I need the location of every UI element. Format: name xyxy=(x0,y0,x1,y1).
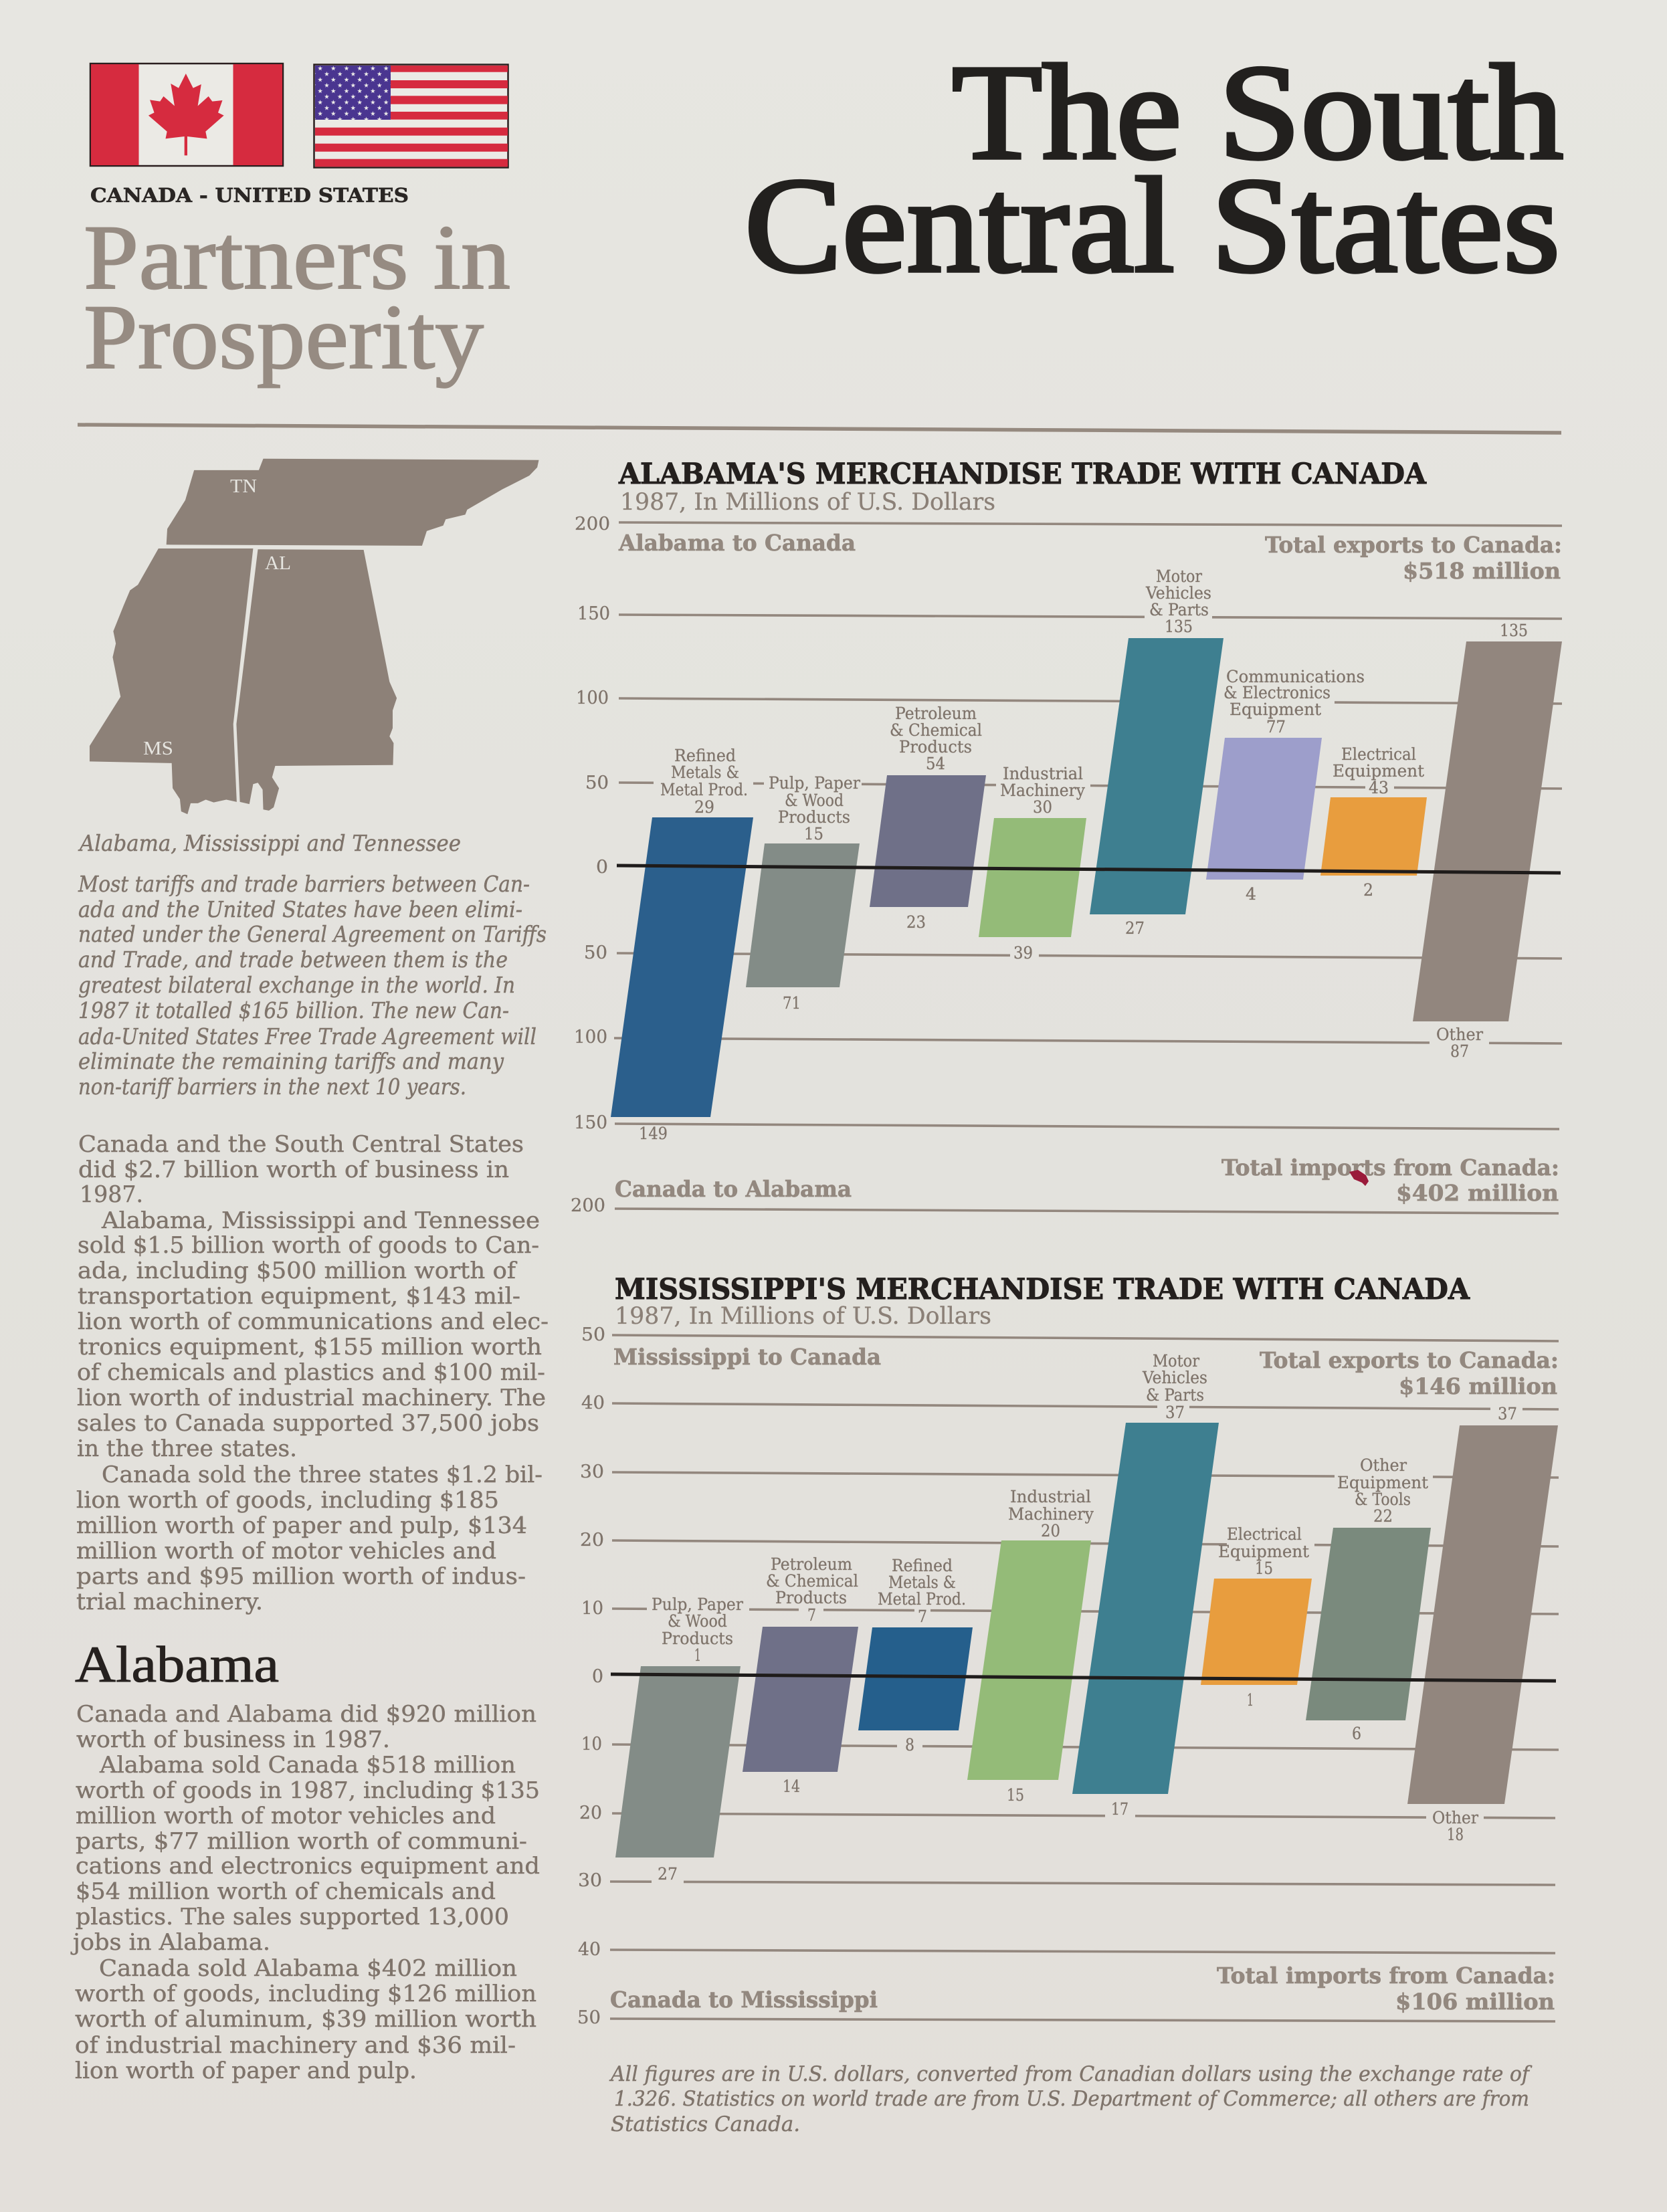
icon: United States flag xyxy=(314,64,508,167)
axis labels: Mississippi: 50 xyxy=(581,1324,605,1345)
legend label: Canada to Alabama: Canada to Alabama xyxy=(615,1176,852,1202)
chart subtitle: Alabama: 1987, In Millions of U.S. Dollars xyxy=(620,489,995,516)
bar: Industrial Machinery: Industrial xyxy=(1010,1487,1091,1506)
bar: Electrical Equipment: 15 xyxy=(1255,1559,1273,1578)
heading: Partners in Prosperity xyxy=(84,206,510,388)
text block: South Central States body: did $2.7 billion worth of business in xyxy=(78,1157,509,1183)
bar: Motor Vehicles and Parts: 135 xyxy=(1165,617,1193,636)
text block: Alabama body: Canada and Alabama did $920 million xyxy=(76,1701,536,1728)
legend label: Canada to Mississippi: Canada to Mississippi xyxy=(610,1987,878,2013)
bar: Other xyxy=(1407,1404,1558,1844)
text block: South Central States body: lion worth of goods, including $185 xyxy=(76,1487,499,1514)
callout: total exports Mississippi xyxy=(1260,1347,1559,1399)
bar: Other: Other xyxy=(1436,1025,1483,1044)
bar: Other: 18 xyxy=(1447,1825,1464,1844)
text block: South Central States body: ada, including $500 million worth of xyxy=(78,1258,518,1284)
chart subtitle: Mississippi: 1987, In Millions of U.S. Dollars xyxy=(615,1303,991,1330)
text block: Alabama body: of industrial machinery and $36 mil- xyxy=(75,2032,516,2059)
bar: Refined Metals and Metal Products: 8 xyxy=(905,1735,914,1754)
text block: Alabama body: worth of goods, including $126 million xyxy=(75,1981,536,2007)
axis labels: Mississippi: 30 xyxy=(578,1870,602,1891)
bar: Electrical Equipment: 43 xyxy=(1369,778,1389,797)
callout: total imports Alabama: $402 million xyxy=(1396,1180,1559,1206)
map caption: Alabama, Mississippi and Tennessee xyxy=(78,830,461,856)
axis labels: Alabama: 150 xyxy=(577,603,610,624)
bar: Petroleum and Chemical Products xyxy=(743,1554,858,1796)
text block: South Central States body: in the three states. xyxy=(77,1435,297,1462)
legend label: Mississippi to Canada: Mississippi to Canada xyxy=(613,1344,881,1370)
text block: italic introduction: and Trade, and trade between them is the xyxy=(78,946,508,973)
text block: South Central States body: million worth of paper and pulp, $134 xyxy=(76,1512,527,1539)
bar: Refined Metals and Metal Products: 29 xyxy=(694,797,714,817)
text block: South Central States body xyxy=(76,1131,549,1615)
bar: Petroleum and Chemical Products: Petroleum xyxy=(771,1554,852,1574)
bar: Other: 37 xyxy=(1498,1404,1517,1423)
bar: Refined Metals and Metal Products: 7 xyxy=(918,1607,927,1626)
bar: Refined Metals and Metal Products: Metal Prod. xyxy=(660,780,748,799)
bar: Communications and Electronics Equipment: 4 xyxy=(1246,884,1256,904)
callout: total exports Mississippi: Total exports to Canada: xyxy=(1260,1347,1559,1373)
panel: Mississippi chart xyxy=(577,1273,1559,2028)
axis labels: Alabama: 50 xyxy=(584,942,607,963)
bar: Pulp, Paper and Wood Products xyxy=(615,1595,743,1884)
bar: Other: 87 xyxy=(1450,1041,1469,1061)
bar: Pulp, Paper and Wood Products: Pulp, Paper xyxy=(652,1595,743,1614)
axis labels: Mississippi: 10 xyxy=(581,1598,603,1619)
text block: italic introduction: Most tariffs and trade barriers between Can- xyxy=(78,871,530,897)
bar: Petroleum and Chemical Products: Products xyxy=(899,737,972,757)
text block: Alabama body: worth of goods in 1987, including $135 xyxy=(76,1777,540,1804)
axis labels: Mississippi: 0 xyxy=(592,1666,603,1687)
bar: Pulp, Paper and Wood Products: Products xyxy=(778,807,850,827)
bar: Motor Vehicles and Parts xyxy=(1072,1351,1219,1819)
bar: Electrical Equipment: 1 xyxy=(1247,1690,1254,1710)
text block: South Central States body: 1987. xyxy=(80,1181,143,1208)
text block: Alabama body: parts, $77 million worth of communi- xyxy=(76,1828,527,1855)
bar: Motor Vehicles and Parts: & Parts xyxy=(1149,600,1209,619)
bar: Communications and Electronics Equipment: Communications xyxy=(1226,667,1365,686)
chart heading: Mississippi: MISSISSIPPI'S MERCHANDISE TRADE WITH CANADA xyxy=(615,1273,1470,1306)
callout: total exports Alabama: $518 million xyxy=(1403,558,1561,584)
text block: South Central States body: parts and $95 million worth of indus- xyxy=(76,1563,526,1590)
bar: Communications and Electronics Equipment: Equipment xyxy=(1230,700,1321,719)
bar: Petroleum and Chemical Products: & Chemical xyxy=(890,720,982,740)
callout: total imports Mississippi xyxy=(1217,1963,1555,2015)
bar: Refined Metals and Metal Products: Refined xyxy=(892,1556,953,1575)
text block: South Central States body: Alabama, Mississippi and Tennessee xyxy=(101,1207,540,1234)
bar: Other Equipment and Tools: 6 xyxy=(1352,1724,1361,1743)
bar: Petroleum and Chemical Products: Petroleum xyxy=(895,704,977,723)
axis labels: Mississippi: 20 xyxy=(579,1803,602,1823)
bar: Industrial Machinery: Machinery xyxy=(1008,1504,1094,1524)
axis labels: Mississippi: 40 xyxy=(578,1939,601,1960)
text block: South Central States body: tronics equipment, $155 million worth xyxy=(78,1334,542,1361)
bar: Industrial Machinery: Industrial xyxy=(1003,764,1083,783)
axis labels: Mississippi: 10 xyxy=(581,1734,602,1754)
text block: Alabama body: worth of business in 1987. xyxy=(76,1726,390,1753)
axis labels: Mississippi: 50 xyxy=(577,2007,601,2028)
callout: total imports Alabama xyxy=(1221,1154,1559,1206)
bar: Electrical Equipment: Electrical xyxy=(1341,744,1416,764)
callout: total exports Alabama: Total exports to Canada: xyxy=(1265,532,1562,558)
bar: Motor Vehicles and Parts: & Parts xyxy=(1146,1385,1204,1405)
legend label: Alabama to Canada: Alabama to Canada xyxy=(618,530,856,556)
bar: Electrical Equipment: Equipment xyxy=(1218,1542,1309,1561)
text block: South Central States body: lion worth of communications and elec- xyxy=(78,1308,549,1335)
text block: italic introduction: ada-United States Free Trade Agreement will xyxy=(78,1023,536,1049)
text block: italic introduction: non-tariff barriers in the next 10 years. xyxy=(78,1074,466,1100)
bar: Motor Vehicles and Parts: Motor xyxy=(1156,567,1202,586)
bar: Industrial Machinery: 30 xyxy=(1033,797,1052,817)
axis labels: Alabama: 100 xyxy=(576,688,609,708)
axis labels: Alabama: 150 xyxy=(574,1112,607,1133)
callout: total imports Alabama: Total imports from Canada: xyxy=(1221,1154,1559,1181)
text block: South Central States body: Canada and the South Central States xyxy=(78,1131,524,1158)
bar: Pulp, Paper and Wood Products: & Wood xyxy=(785,791,844,810)
bar: Petroleum and Chemical Products: 54 xyxy=(926,754,945,773)
text block: italic introduction: 1987 it totalled $165 billion. The new Can- xyxy=(78,997,509,1023)
bar: Pulp, Paper and Wood Products: Products xyxy=(662,1629,733,1648)
bar: Other xyxy=(1413,621,1562,1061)
bar: Motor Vehicles and Parts xyxy=(1090,567,1223,938)
bar: Other Equipment and Tools xyxy=(1306,1455,1431,1743)
bar: Electrical Equipment: 2 xyxy=(1363,880,1373,900)
bar: Industrial Machinery: Machinery xyxy=(1000,781,1086,800)
heading: Alabama: Alabama xyxy=(75,1635,279,1693)
heading: Canada - United States: CANADA - UNITED STATES xyxy=(90,184,409,207)
text block: italic introduction: nated under the General Agreement on Tariffs xyxy=(78,921,547,947)
text block: South Central States body: sales to Canada supported 37,500 jobs xyxy=(77,1410,539,1437)
bar: Petroleum and Chemical Products: & Chemical xyxy=(766,1571,858,1591)
axis labels: Mississippi: 20 xyxy=(580,1530,604,1550)
bar: Refined Metals and Metal Products: Refined xyxy=(674,746,736,765)
axis labels: Alabama xyxy=(571,514,610,1216)
callout: total exports Mississippi: $146 million xyxy=(1399,1373,1557,1399)
text block: Alabama body: plastics. The sales supported 13,000 xyxy=(76,1904,509,1930)
bar: Motor Vehicles and Parts: Vehicles xyxy=(1145,583,1211,603)
bar: Industrial Machinery: 20 xyxy=(1041,1521,1060,1540)
title: The South Central States: Central States xyxy=(745,150,1560,300)
bar: Petroleum and Chemical Products: 14 xyxy=(783,1777,800,1796)
text block: Alabama body: jobs in Alabama. xyxy=(70,1929,270,1956)
callout: total imports Mississippi: $106 million xyxy=(1395,1989,1555,2015)
axis labels: Alabama: 50 xyxy=(585,773,609,793)
heading: Partners in Prosperity: Prosperity xyxy=(84,286,484,388)
panel: Alabama chart xyxy=(571,458,1562,1216)
map: Alabama, Mississippi and Tennessee: TN xyxy=(230,476,257,497)
bar: Communications and Electronics Equipment: & Electronics xyxy=(1223,683,1331,702)
axis labels: Alabama: 200 xyxy=(575,514,610,534)
bar: Refined Metals and Metal Products: 149 xyxy=(639,1124,668,1143)
axis labels: Alabama: 0 xyxy=(596,857,608,878)
text block: Alabama body xyxy=(70,1701,540,2084)
map: Alabama, Mississippi and Tennessee: MS xyxy=(143,738,173,759)
text block: italic introduction xyxy=(78,871,547,1100)
map: Alabama, Mississippi and Tennessee xyxy=(90,459,538,814)
bar: Pulp, Paper and Wood Products xyxy=(746,773,860,1013)
bar: Other: Other xyxy=(1432,1808,1478,1827)
bar: Pulp, Paper and Wood Products: Pulp, Paper xyxy=(769,773,860,793)
bar: Electrical Equipment: Equipment xyxy=(1333,761,1424,781)
text block: Alabama body: Alabama sold Canada $518 million xyxy=(99,1752,516,1779)
bar: Motor Vehicles and Parts: 37 xyxy=(1165,1403,1185,1422)
bar: Electrical Equipment xyxy=(1320,744,1427,900)
text block: South Central States body: transportation equipment, $143 mil- xyxy=(78,1283,520,1310)
text block: South Central States body: lion worth of industrial machinery. The xyxy=(77,1385,546,1411)
callout: total exports Alabama xyxy=(1265,532,1562,584)
bar: Other Equipment and Tools: & Tools xyxy=(1355,1490,1411,1509)
bar: Refined Metals and Metal Products: Metals & xyxy=(888,1573,956,1592)
text block: South Central States body: sold $1.5 billion worth of goods to Can- xyxy=(78,1232,539,1259)
bar: Motor Vehicles and Parts: Motor xyxy=(1153,1351,1199,1371)
bar: Other Equipment and Tools: 22 xyxy=(1373,1506,1393,1526)
text block: footnote: All figures are in U.S. dollars, converted from Canadian dollars using the exchange rate of xyxy=(609,2062,1533,2086)
heading: Partners in Prosperity: Partners in xyxy=(84,206,510,308)
bar: Communications and Electronics Equipment: 77 xyxy=(1266,717,1286,736)
bar: Pulp, Paper and Wood Products: & Wood xyxy=(668,1611,727,1631)
text block: Alabama body: Canada sold Alabama $402 million xyxy=(99,1955,517,1982)
callout: total imports Mississippi: Total imports from Canada: xyxy=(1217,1963,1555,1989)
bar: Pulp, Paper and Wood Products: 27 xyxy=(658,1864,678,1884)
title: The South Central States xyxy=(745,37,1563,300)
bar: Industrial Machinery xyxy=(967,1487,1094,1805)
axis labels: Alabama: 100 xyxy=(574,1027,607,1047)
axis labels: Mississippi: 40 xyxy=(581,1393,605,1413)
bar: Petroleum and Chemical Products xyxy=(870,704,986,932)
text block: footnote: 1.326. Statistics on world trade are from U.S. Department of Commerce; all others are from xyxy=(614,2087,1529,2111)
text block: italic introduction: greatest bilateral exchange in the world. In xyxy=(78,972,515,998)
bar: Petroleum and Chemical Products: 23 xyxy=(906,912,926,932)
title: The South Central States: The South xyxy=(952,37,1563,187)
bar: Electrical Equipment: Electrical xyxy=(1227,1524,1302,1544)
bar: Refined Metals and Metal Products: Metals & xyxy=(671,763,739,782)
text block: footnote: Statistics Canada. xyxy=(611,2112,800,2136)
text block: italic introduction: eliminate the remaining tariffs and many xyxy=(78,1048,504,1074)
bar: Industrial Machinery xyxy=(979,764,1086,963)
bar: Motor Vehicles and Parts: Vehicles xyxy=(1142,1368,1207,1387)
text block: South Central States body: trial machinery. xyxy=(76,1589,263,1615)
bar: Pulp, Paper and Wood Products: 1 xyxy=(694,1645,701,1665)
bar: Refined Metals and Metal Products xyxy=(858,1556,973,1754)
axis labels: Mississippi xyxy=(577,1324,605,2028)
axis labels: Mississippi: 30 xyxy=(580,1462,604,1482)
bar: Refined Metals and Metal Products: Metal Prod. xyxy=(878,1589,966,1609)
bar: Petroleum and Chemical Products: 7 xyxy=(807,1605,816,1625)
bar: Motor Vehicles and Parts: 27 xyxy=(1125,918,1145,938)
text block: Alabama body: million worth of motor vehicles and xyxy=(76,1803,496,1829)
text block: South Central States body: of chemicals and plastics and $100 mil- xyxy=(77,1359,545,1386)
text block: Alabama body: $54 million worth of chemicals and xyxy=(76,1878,496,1905)
bar: Other Equipment and Tools: Equipment xyxy=(1337,1473,1428,1492)
bar: Other Equipment and Tools: Other xyxy=(1360,1455,1407,1475)
bar: Other: 135 xyxy=(1500,621,1528,640)
bar: Industrial Machinery: 39 xyxy=(1013,943,1033,963)
bar: Electrical Equipment xyxy=(1201,1524,1312,1710)
text block: Alabama body: lion worth of paper and pulp. xyxy=(75,2057,417,2084)
bar: Pulp, Paper and Wood Products: 15 xyxy=(804,824,823,843)
bar: Refined Metals and Metal Products xyxy=(611,746,753,1143)
bar: Petroleum and Chemical Products: Products xyxy=(775,1588,847,1607)
text block: italic introduction: ada and the United States have been elimi- xyxy=(78,896,522,922)
map: Alabama, Mississippi and Tennessee: AL xyxy=(265,552,291,574)
bar: Industrial Machinery: 15 xyxy=(1007,1785,1024,1805)
bar: Pulp, Paper and Wood Products: 71 xyxy=(783,993,801,1013)
bar: Communications and Electronics Equipment xyxy=(1206,667,1365,904)
text block: South Central States body: Canada sold the three states $1.2 bil- xyxy=(102,1462,543,1488)
text block: South Central States body: million worth of motor vehicles and xyxy=(76,1538,496,1565)
bar: Motor Vehicles and Parts: 17 xyxy=(1111,1799,1129,1819)
text block: Alabama body: worth of aluminum, $39 million worth xyxy=(75,2006,536,2033)
text block: footnote xyxy=(609,2062,1533,2136)
icon: Canadian flag xyxy=(90,64,283,166)
text block: Alabama body: cations and electronics equipment and xyxy=(76,1853,540,1880)
chart heading: Alabama: ALABAMA'S MERCHANDISE TRADE WITH CANADA xyxy=(618,458,1427,491)
axis labels: Alabama: 200 xyxy=(571,1195,605,1216)
